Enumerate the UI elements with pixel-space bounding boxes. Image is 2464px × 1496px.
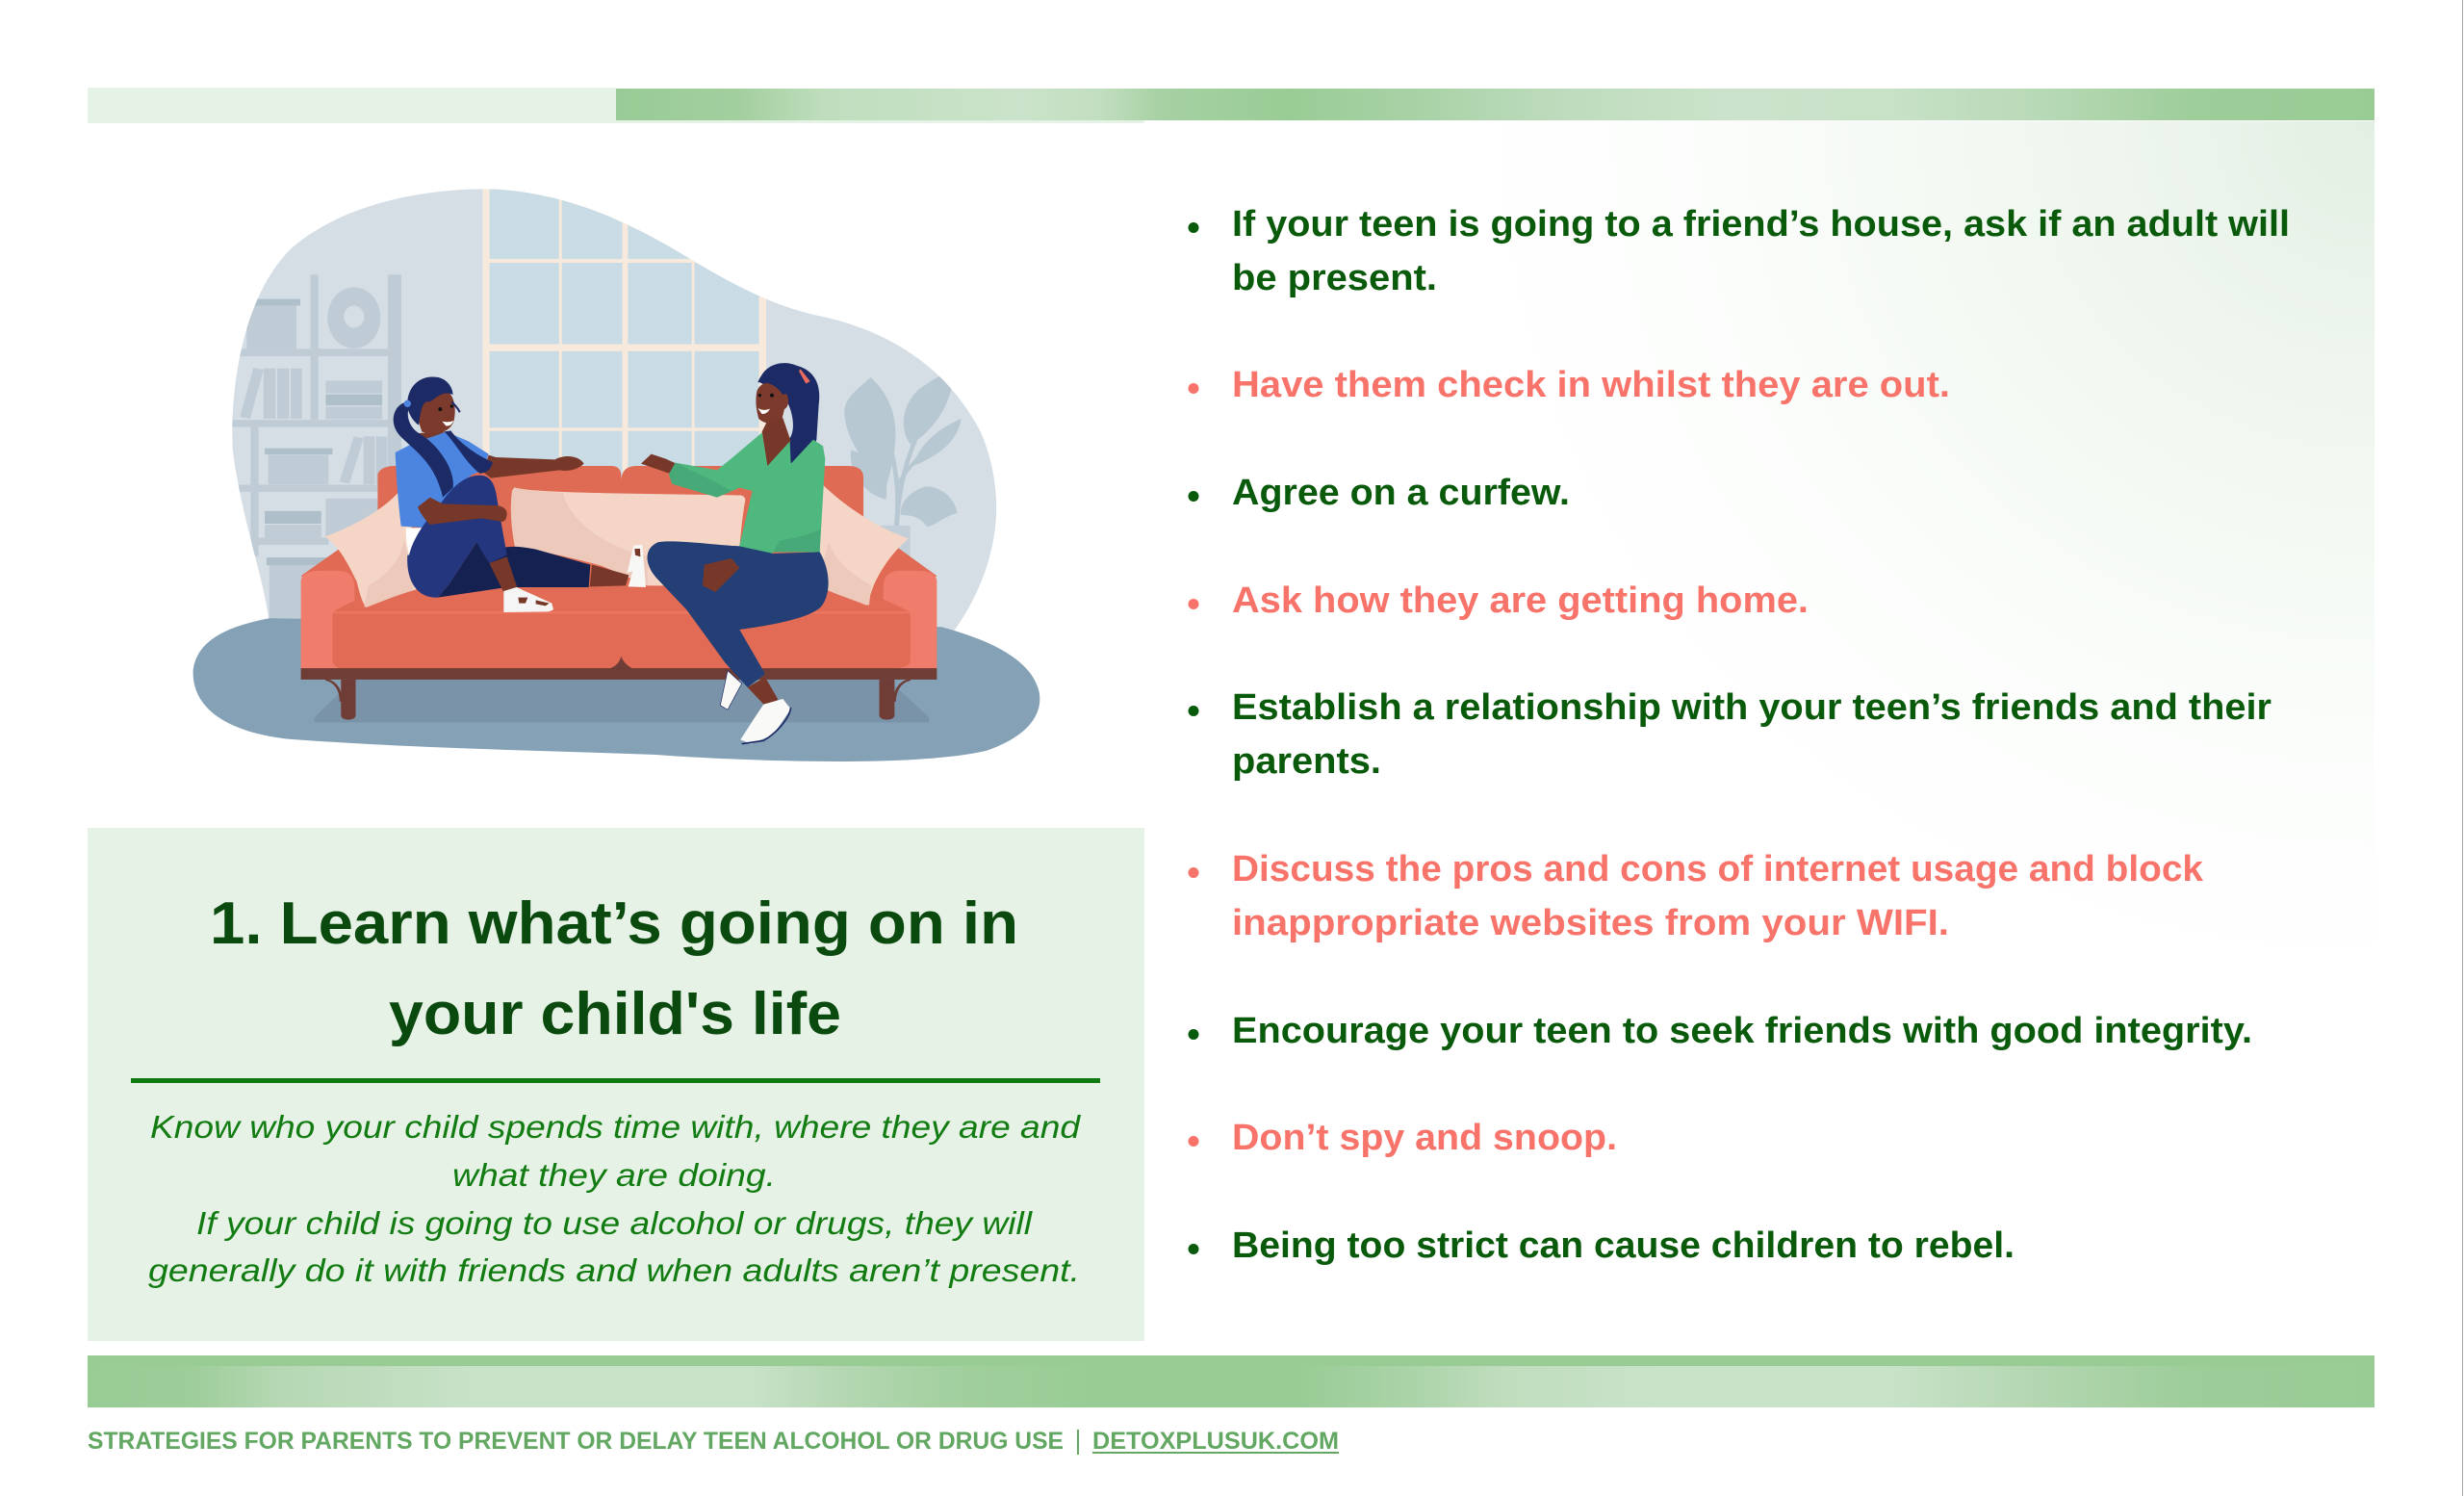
tip 7: Encourage your teen to seek friends with good integrity. — [1232, 1011, 2252, 1051]
bottom gradient bar — [88, 1355, 2374, 1407]
bookshelf — [230, 274, 401, 624]
figures — [394, 363, 829, 744]
illustration: mother and teen talking on a sofa — [173, 173, 1059, 761]
tip 5: parents. — [1232, 741, 1381, 782]
footer text: STRATEGIES FOR PARENTS TO PREVENT OR DELAY TEEN ALCOHOL OR DRUG USE — [88, 1428, 1064, 1455]
bullet list of tips — [1188, 204, 2290, 1266]
teen girl — [394, 377, 646, 612]
rug — [193, 618, 1040, 761]
description text: what they are doing. — [452, 1157, 776, 1193]
description text: Know who your child spends time with, where they are and — [150, 1109, 1082, 1145]
tip 5: Establish a relationship with your teen’s friends and their — [1232, 687, 2272, 728]
heading: 1. Learn what’s going on in — [210, 890, 1018, 957]
panel: right tips gradient background — [1144, 121, 2374, 988]
room backdrop with window, shelves and plant — [173, 173, 1059, 761]
description text: generally do it with friends and when adults aren’t present. — [148, 1252, 1080, 1288]
mother — [641, 363, 829, 744]
tip 1: If your teen is going to a friend’s house, ask if an adult will — [1232, 204, 2290, 245]
sofa — [301, 466, 937, 720]
tip 1 — [1188, 204, 2290, 298]
description text: If your child is going to use alcohol or drugs, they will — [196, 1205, 1034, 1241]
footer text: DETOXPLUSUK.COM — [1092, 1428, 1339, 1455]
panel: top header pale block — [88, 88, 616, 123]
top gradient bar — [616, 89, 2374, 120]
tip 6: inappropriate websites from your WIFI. — [1232, 903, 1949, 943]
description text — [148, 1109, 1082, 1288]
heading — [210, 890, 1018, 1047]
heading: your child's life — [389, 981, 841, 1047]
rug shadow — [315, 680, 929, 722]
tip 9: Being too strict can cause children to rebel. — [1232, 1225, 2015, 1266]
tip 1: be present. — [1232, 258, 1437, 298]
tip 8: Don’t spy and snoop. — [1232, 1118, 1617, 1158]
tip 6 — [1188, 849, 2204, 943]
tip 2: Have them check in whilst they are out. — [1232, 365, 1950, 405]
houseplant — [844, 371, 962, 565]
tip 6: Discuss the pros and cons of internet usage and block — [1232, 849, 2204, 890]
sofa pillows — [324, 491, 416, 607]
tip 3: Agree on a curfew. — [1232, 473, 1570, 513]
tip 5 — [1188, 687, 2272, 782]
panel: heading and description — [88, 828, 1144, 1341]
panel: pale strip below header — [616, 119, 1144, 123]
window — [483, 173, 766, 487]
tip 4: Ask how they are getting home. — [1232, 580, 1809, 621]
heading rule — [131, 1078, 1100, 1083]
